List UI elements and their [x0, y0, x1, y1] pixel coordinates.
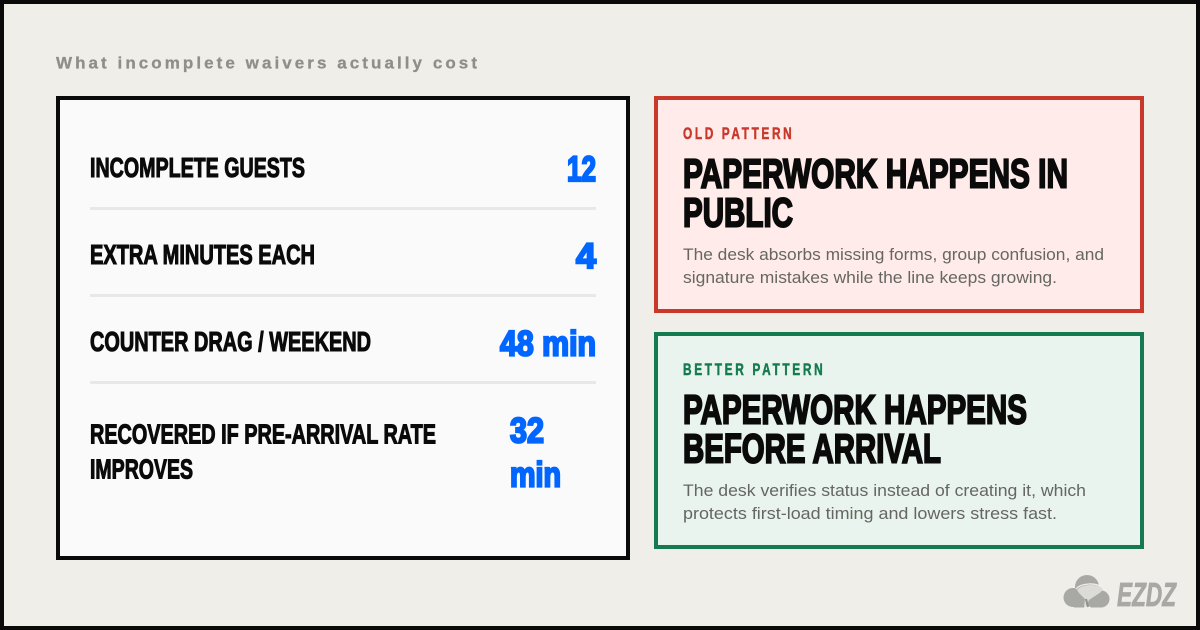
label: better pattern: BETTER PATTERN	[683, 361, 823, 380]
heading: paperwork happens before arrival: PAPERWORK HAPPENS	[683, 386, 1027, 432]
heading: paperwork happens before arrival: BEFORE ARRIVAL	[683, 426, 941, 472]
text: old pattern description: The desk absorbs missing forms, group confusion, and	[683, 245, 1104, 264]
row: recovered if pre-arrival rate improves: 32	[510, 412, 544, 450]
heading: paperwork happens before arrival	[683, 386, 1027, 472]
logo: EZDZ	[1064, 575, 1177, 613]
heading: paperwork happens in public: PAPERWORK HAPPENS IN	[683, 150, 1068, 196]
row: counter drag per weekend	[90, 324, 596, 364]
label: old pattern: OLD PATTERN	[683, 125, 792, 144]
panel: better pattern	[656, 334, 1142, 547]
row: recovered if pre-arrival rate improves: RECOVERED IF PRE-ARRIVAL RATE	[90, 418, 436, 450]
panel: cost breakdown	[58, 98, 628, 558]
row: recovered if pre-arrival rate improves: min	[510, 456, 561, 494]
row: extra minutes each: 4	[576, 237, 597, 276]
text: old pattern description	[683, 245, 1104, 287]
row: recovered if pre-arrival rate improves: IMPROVES	[90, 454, 193, 484]
icon: cloud with paraglider	[1064, 575, 1110, 608]
row: counter drag per weekend: 48 min	[500, 324, 596, 364]
row: incomplete guests: INCOMPLETE GUESTS	[90, 152, 305, 183]
row: counter drag per weekend: COUNTER DRAG / WEEKEND	[90, 326, 371, 357]
heading: eyebrow title: What incomplete waivers actually cost	[56, 54, 477, 72]
row: extra minutes each: EXTRA MINUTES EACH	[90, 239, 315, 270]
row: recovered if pre-arrival rate improves	[90, 412, 561, 494]
heading: paperwork happens in public: PUBLIC	[683, 190, 793, 236]
row: incomplete guests	[90, 150, 596, 189]
row: extra minutes each	[90, 237, 597, 276]
row: incomplete guests: 12	[567, 150, 596, 189]
panel: old pattern	[656, 98, 1142, 311]
heading: paperwork happens in public	[683, 150, 1068, 236]
text: better pattern description: protects first-load timing and lowers stress fast.	[683, 504, 1057, 523]
text: old pattern description: signature mistakes while the line keeps growing.	[683, 268, 1057, 287]
text: better pattern description	[683, 481, 1086, 523]
text: better pattern description: The desk verifies status instead of creating it, which	[683, 481, 1086, 500]
